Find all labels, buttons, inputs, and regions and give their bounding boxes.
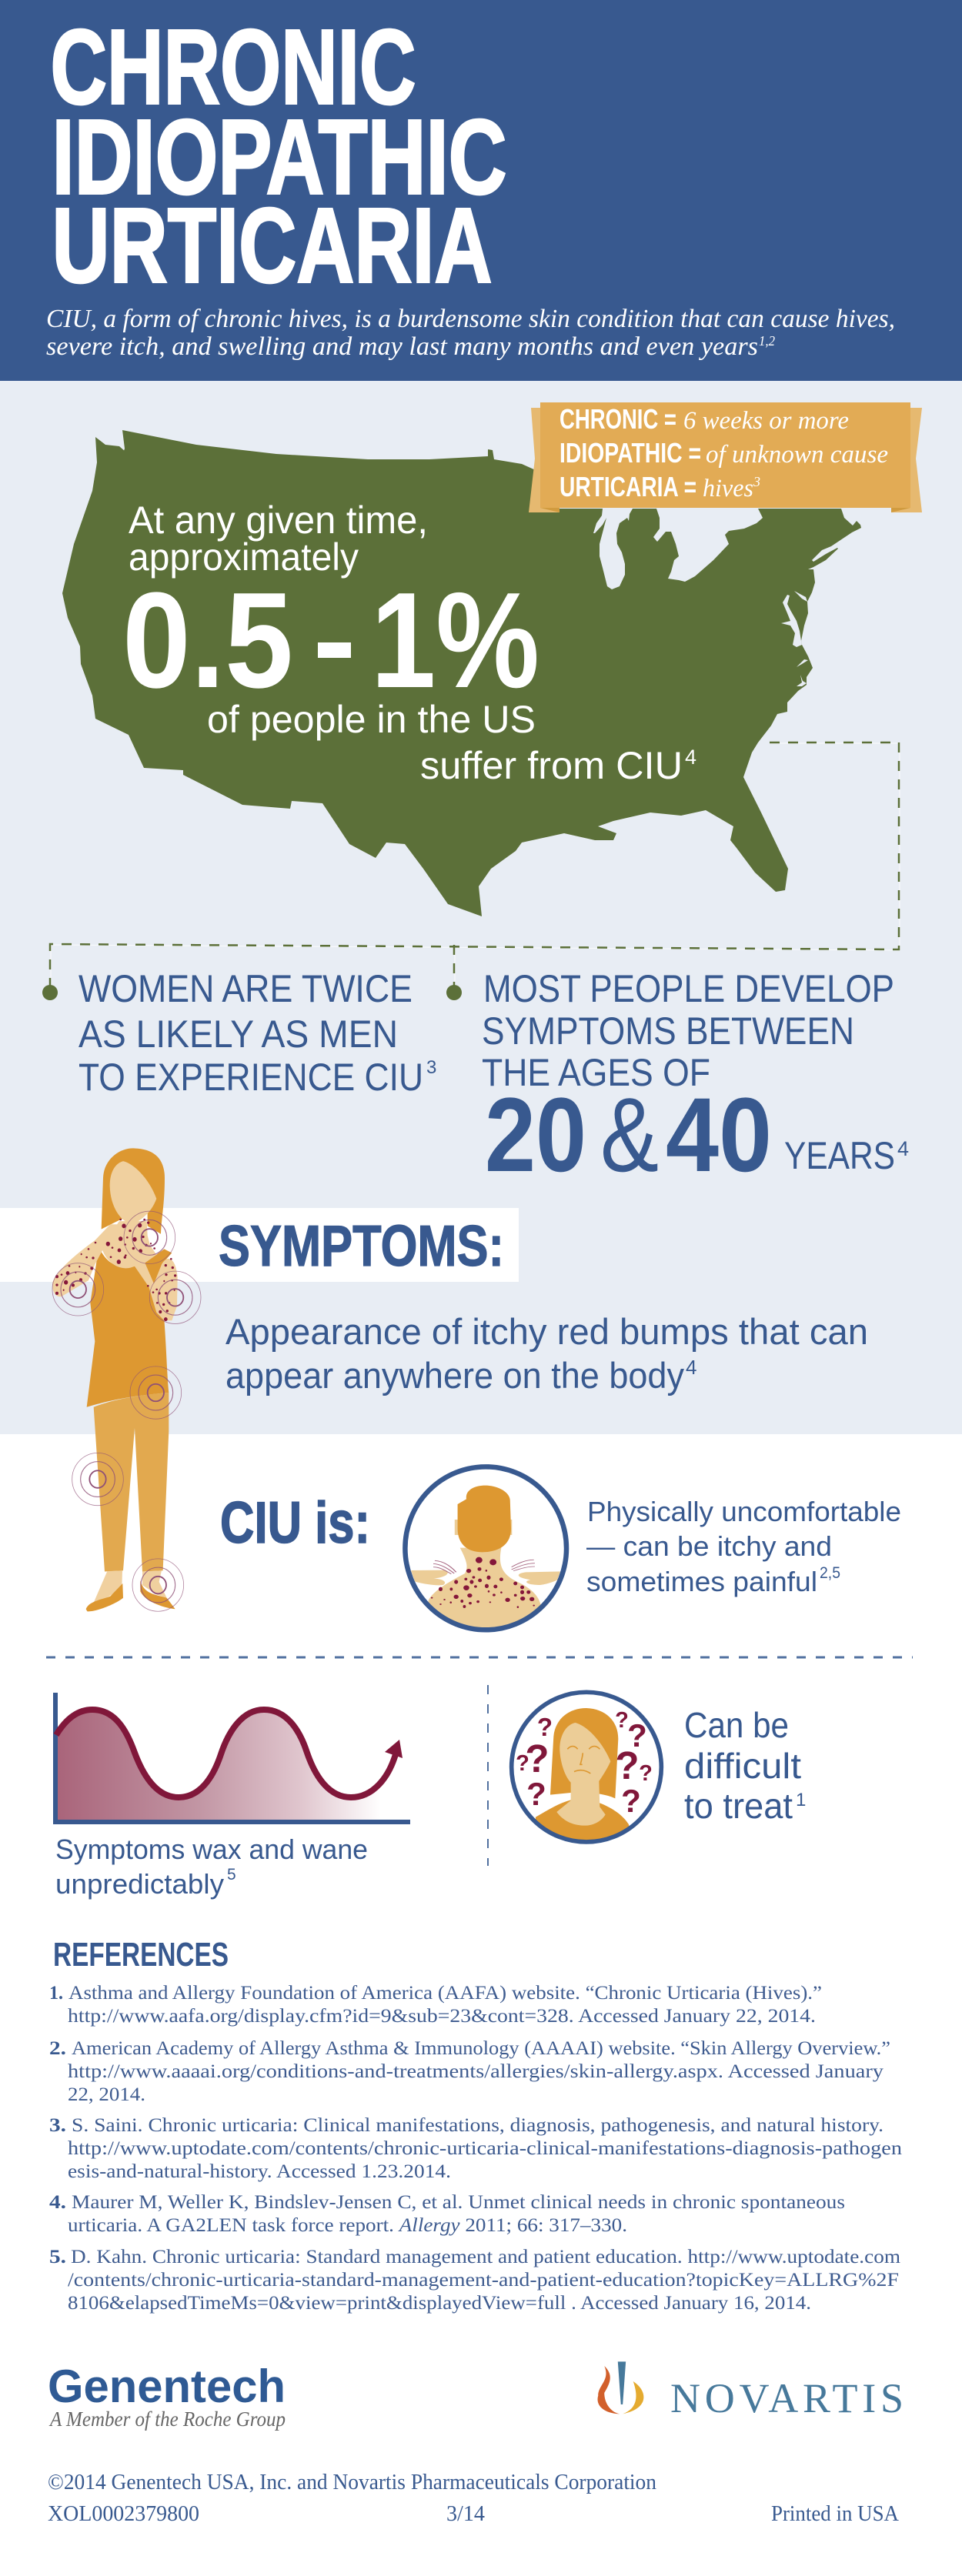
statistic: 20 and 40 <box>485 1076 772 1194</box>
hair <box>102 1148 165 1234</box>
ears <box>455 1520 512 1535</box>
axes <box>53 1693 58 1824</box>
references list: Maurer M, Weller K, Bindslev-Jensen C, et al. Unmet clinical needs in chronic spontaneous <box>72 2192 845 2213</box>
text block: women twice as likely <box>78 967 436 1099</box>
map text: approximately <box>129 536 359 579</box>
text block: difficult to treat: to treat <box>684 1786 793 1826</box>
references list: http://www.aaaai.org/conditions-and-treatments/allergies/skin-allergy.aspx. Accessed January <box>68 2061 884 2082</box>
references list: urticaria. A GA2LEN task force report. Allergy 2011; 66: 317–330. <box>68 2215 627 2236</box>
text block: age of onset: YEARS <box>784 1134 895 1177</box>
references list: 5. <box>49 2247 66 2267</box>
references list: 4. <box>49 2192 66 2213</box>
references list: Asthma and Allergy Foundation of America (AAFA) website. “Chronic Urticaria (Hives).” <box>68 1983 822 2004</box>
text block: women twice as likely: WOMEN ARE TWICE <box>78 967 413 1010</box>
statistic: 0.5-1%: 1% <box>371 564 539 716</box>
chart: symptoms wax and wane <box>53 1693 410 1824</box>
text block: physically uncomfortable: 2,5 <box>820 1564 840 1582</box>
references list: /contents/chronic-urticaria-standard-management-and-patient-education?topicKey=ALLRG%2F <box>68 2270 899 2291</box>
question marks: ? <box>516 1751 529 1776</box>
spots <box>431 1557 535 1608</box>
logo: Novartis <box>598 2361 904 2421</box>
subtitle <box>46 305 895 361</box>
references list: D. Kahn. Chronic urticaria: Standard management and patient education. http://www.uptodate.com <box>71 2247 901 2267</box>
question marks: ? <box>639 1761 653 1786</box>
statistic: 20 and 40: & <box>600 1076 659 1194</box>
subtitle: 1,2 <box>759 333 775 349</box>
definition text: 6 weeks or more <box>683 407 849 435</box>
ring <box>405 1467 566 1630</box>
question marks: ? <box>627 1717 647 1753</box>
text block: age of onset: THE AGES OF <box>482 1051 710 1094</box>
question marks: ? <box>525 1737 549 1780</box>
map text: of people in the US <box>207 698 536 741</box>
references list: http://www.uptodate.com/contents/chronic-urticaria-clinical-manifestations-diagnosis-pathogen <box>68 2138 903 2159</box>
question marks: ? <box>615 1708 629 1733</box>
footer text: Printed in USA <box>771 2502 900 2526</box>
delaware bay <box>794 591 807 602</box>
subtitle: CIU, a form of chronic hives, is a burdensome skin condition that can cause hives, <box>46 305 895 333</box>
map text: At any given time, <box>129 499 428 542</box>
text block: difficult to treat: difficult <box>684 1746 801 1786</box>
shoes <box>86 1583 123 1611</box>
title <box>51 8 506 305</box>
references list: 8106&elapsedTimeMs=0&view=print&displayedView=full . Accessed January 16, 2014. <box>68 2293 811 2314</box>
references list: American Academy of Allergy Asthma & Immunology (AAAAI) website. “Skin Allergy Overview.” <box>72 2038 890 2059</box>
panel: definitions ribbon <box>529 402 922 512</box>
text block: symptom description <box>225 1311 868 1396</box>
head <box>458 1486 511 1552</box>
heading: CIU is: CIU is: <box>220 1490 370 1556</box>
text block: age of onset: MOST PEOPLE DEVELOP <box>483 967 894 1010</box>
question marks: ? <box>526 1776 546 1812</box>
logo: Genentech: Genentech <box>48 2361 286 2412</box>
footer text: ©2014 Genentech USA, Inc. and Novartis Pharmaceuticals Corporation <box>48 2471 656 2494</box>
statistic: 20 and 40: 40 <box>666 1076 772 1194</box>
logo: Novartis: NOVARTIS <box>670 2375 904 2421</box>
face <box>110 1161 156 1224</box>
text block: age of onset: 4 <box>897 1137 909 1160</box>
features <box>567 1747 600 1774</box>
text block: age of onset: SYMPTOMS BETWEEN <box>482 1009 854 1053</box>
definition text: IDIOPATHIC = <box>559 437 701 469</box>
footer text: 3/14 <box>446 2502 485 2526</box>
icon: scratching neck <box>405 1467 566 1631</box>
sounds <box>797 659 808 686</box>
question marks <box>516 1708 653 1819</box>
definition text <box>559 403 888 502</box>
hair <box>550 1708 618 1798</box>
panel: header <box>0 0 962 381</box>
illustration: woman with hives <box>52 1148 201 1611</box>
text block: symptom description: Appearance of itchy red bumps that can <box>225 1311 868 1352</box>
references list: 1. <box>49 1983 63 2004</box>
title: CHRONIC <box>51 8 416 126</box>
map text <box>122 499 696 787</box>
feet <box>94 1570 122 1603</box>
text block: difficult to treat: 1 <box>796 1790 806 1810</box>
text block: symptom description: 4 <box>686 1356 696 1379</box>
references list: 2. <box>49 2038 66 2059</box>
skin <box>556 1723 610 1826</box>
bullet: women <box>42 985 58 1000</box>
text block: physically uncomfortable: sometimes painful <box>586 1566 817 1597</box>
references list: 22, 2014. <box>68 2084 145 2105</box>
subtitle: severe itch, and swelling and may last many months and even years <box>46 332 758 361</box>
references list: http://www.aafa.org/display.cfm?id=9&sub=23&cont=328. Accessed January 22, 2014. <box>68 2006 816 2027</box>
arms <box>52 1224 119 1296</box>
title: IDIOPATHIC <box>52 98 506 217</box>
map text: 4 <box>685 746 696 769</box>
references list: 3. <box>49 2115 66 2136</box>
footer text: XOL0002379800 <box>48 2502 199 2526</box>
definition text: of unknown cause <box>706 441 888 469</box>
text block: wax and wane <box>55 1834 368 1900</box>
pants <box>94 1393 169 1572</box>
text block: difficult to treat <box>684 1705 806 1826</box>
references list: esis-and-natural-history. Accessed 1.23.2014. <box>68 2161 451 2182</box>
text block: physically uncomfortable: Physically uncomfortable <box>587 1496 901 1527</box>
heading: symptoms: SYMPTOMS: <box>219 1213 504 1278</box>
hands <box>406 1570 448 1585</box>
definition text: 3 <box>753 474 760 489</box>
panel: US prevalence background <box>0 381 962 1434</box>
text block: women twice as likely: 3 <box>426 1057 436 1078</box>
US map <box>62 430 861 916</box>
question marks: ? <box>537 1713 553 1741</box>
statistic: 20 and 40: 20 <box>485 1076 586 1194</box>
statistic: 0.5-1% <box>122 564 539 716</box>
shaded area under curve <box>56 1710 381 1820</box>
neck and chest <box>102 1221 156 1268</box>
itch rings <box>52 1211 201 1611</box>
text block: difficult to treat: Can be <box>684 1705 789 1745</box>
definition text: URTICARIA = <box>559 471 696 502</box>
wave line <box>56 1710 396 1797</box>
text block: physically uncomfortable: — can be itchy and <box>586 1530 832 1562</box>
bullet: ages <box>446 985 462 1000</box>
heading: references: REFERENCES <box>53 1936 229 1974</box>
ring <box>512 1692 661 1842</box>
text block: women twice as likely: TO EXPERIENCE CIU <box>78 1056 423 1099</box>
references list: S. Saini. Chronic urticaria: Clinical manifestations, diagnosis, pathogenesis, and natural history. <box>72 2115 884 2136</box>
definition text: hives <box>703 475 753 502</box>
text block: wax and wane: Symptoms wax and wane <box>55 1834 368 1865</box>
top <box>87 1246 172 1407</box>
definition text: CHRONIC = <box>559 403 676 435</box>
text block: age of onset <box>482 967 909 1194</box>
text block: symptom description: appear anywhere on the body <box>225 1355 684 1396</box>
icon: confused woman <box>512 1692 661 1847</box>
title: URTICARIA <box>52 186 493 305</box>
shoulders and neck <box>428 1548 540 1627</box>
flame mark <box>598 2361 643 2414</box>
symptoms heading band <box>0 1208 519 1282</box>
statistic: 0.5-1%: 0.5 <box>122 564 293 716</box>
footer text <box>48 2471 900 2526</box>
references list <box>49 1983 903 2314</box>
question marks: ? <box>615 1743 640 1787</box>
text block: wax and wane: 5 <box>227 1866 236 1884</box>
chesapeake bay <box>781 595 802 647</box>
logo: Genentech: A Member of the Roche Group <box>48 2407 286 2431</box>
map text: suffer from CIU <box>420 744 683 787</box>
dashed connector lines <box>50 742 899 986</box>
text block: women twice as likely: AS LIKELY AS MEN <box>78 1013 398 1056</box>
hive spots <box>55 1219 176 1321</box>
question marks: ? <box>621 1783 641 1819</box>
body <box>536 1800 630 1840</box>
text block: physically uncomfortable <box>586 1496 901 1597</box>
scratch marks <box>433 1560 535 1574</box>
arrowhead <box>385 1740 403 1758</box>
text block: wax and wane: unpredictably <box>55 1868 224 1900</box>
